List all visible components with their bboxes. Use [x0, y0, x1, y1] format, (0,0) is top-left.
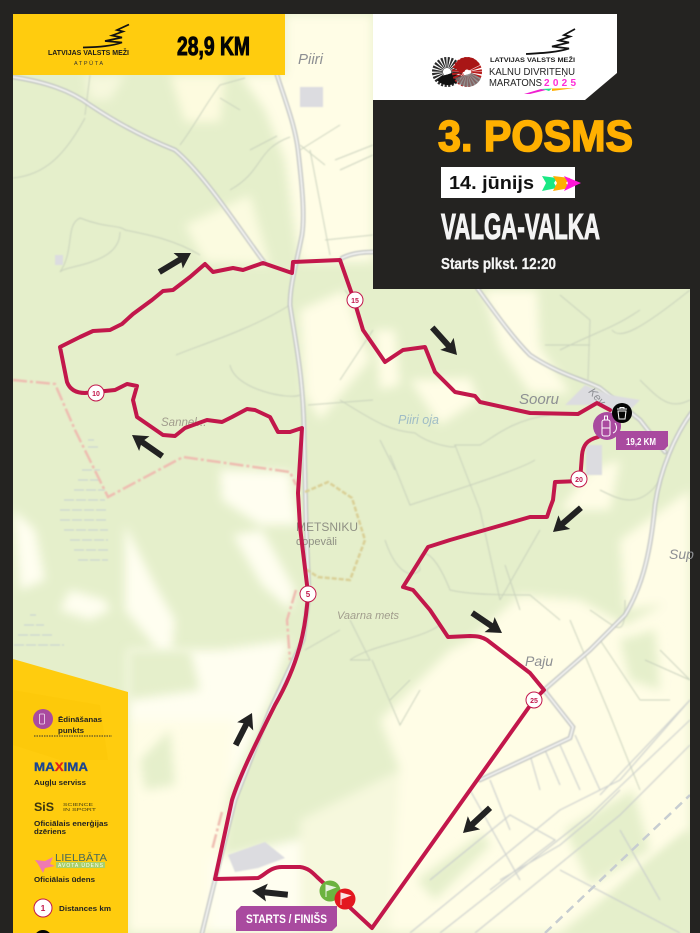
legend: maxima	[34, 760, 88, 787]
arrow: north lower left	[228, 709, 260, 749]
date box: 14. jūnijs	[449, 173, 534, 193]
logo text: LATVIJAS VALSTS MEŽI	[490, 55, 575, 64]
legend: lielbata	[34, 852, 107, 884]
distance marker: 25: 25	[530, 698, 538, 705]
place name: Kev: Kev	[586, 386, 608, 409]
distance marker: 20	[571, 471, 587, 487]
panel: legend	[13, 659, 128, 933]
protected area	[304, 482, 365, 580]
panel: title block	[373, 14, 700, 289]
distance marker: 5: 5	[306, 590, 311, 599]
place name: Metsniku dopevali	[296, 520, 358, 548]
place name: Piiri oja: Piiri oja	[398, 413, 439, 427]
arrow: northwest left	[127, 428, 167, 464]
label: starts finiss	[236, 906, 337, 931]
distance text: 28,9 KM	[177, 31, 250, 61]
legend: lielbata: Oficiālais ūdens	[34, 875, 95, 884]
legend: sis: SCIENCE	[63, 802, 93, 807]
legend stripes	[13, 690, 108, 760]
place name: Metsniku dopevali: METSNIKU	[296, 520, 358, 534]
legend: food point: Ēdināšanas	[58, 715, 102, 724]
railway	[545, 795, 690, 933]
legend: lielbata: LIELBĀTA	[55, 852, 107, 864]
logo: lightning	[526, 29, 575, 54]
legend: maxima: Augļu serviss	[34, 778, 86, 787]
legend: sis: SiS	[34, 800, 54, 814]
logo text: year: 2025	[544, 78, 576, 89]
legend: lielbata: AVOTA ŪDENS	[58, 862, 104, 869]
logo text: maratons: MARATONS	[489, 78, 542, 89]
label: 19,2 km	[616, 431, 668, 450]
arrow: southwest right	[547, 501, 587, 539]
minor roads and streams	[13, 75, 690, 790]
legend: distance marker: Distances km	[59, 904, 111, 913]
distance marker: 10: 10	[92, 391, 100, 398]
legend: maxima: MAXIMA	[34, 760, 88, 774]
place name: Sannel: Sannel...	[161, 417, 206, 429]
legend: sis: dzēriens	[34, 827, 66, 836]
panel: distance header	[13, 14, 285, 75]
legend: sis: Oficiālais enerģijas	[34, 819, 108, 828]
arrow: southeast upper middle	[426, 321, 464, 361]
logo: wheels	[437, 57, 481, 87]
legend: distance marker: 1	[41, 903, 46, 913]
distance marker: 10	[88, 385, 104, 401]
place name: Vaarna mets: Vaarna mets	[337, 610, 399, 622]
icon: trash bin	[612, 403, 632, 423]
logo: lvm atputa	[48, 24, 129, 67]
logo text: kalnu: KALNU DIVRITEŅU	[489, 67, 575, 78]
distance marker: 20: 20	[575, 477, 583, 484]
distance marker: 15	[347, 292, 363, 308]
place name: Metsniku dopevali: dopevāli	[296, 536, 337, 548]
icon: finish flag red	[334, 888, 356, 910]
place name: Sup: Sup	[669, 546, 694, 562]
place name: Sooru: Sooru	[519, 391, 560, 408]
start time: Starts plkst. 12:20	[441, 256, 556, 273]
legend: trash icon	[34, 930, 52, 933]
label: starts finiss: STARTS / FINIŠS	[246, 911, 327, 926]
logo streak	[524, 88, 575, 94]
logo: lvm atputa: LATVIJAS VALSTS MEŽI	[48, 48, 129, 57]
distance marker: 15: 15	[351, 298, 359, 305]
arrow: southwest lower	[457, 801, 496, 840]
distance marker: 25	[526, 692, 542, 708]
icon: bottle feed zone	[593, 412, 621, 440]
wetland hatching	[14, 440, 108, 645]
legend: food point	[33, 709, 102, 735]
route line	[60, 260, 610, 928]
legend: sis: IN SPORT	[63, 807, 96, 812]
arrow: northeast upper left	[155, 245, 196, 280]
frame top	[0, 0, 700, 14]
settlements	[55, 87, 640, 872]
label: 19,2 km: 19,2 KM	[626, 436, 656, 448]
arrow: southeast middle	[467, 605, 507, 640]
heading: valga-valka: VALGA-VALKA	[441, 206, 600, 247]
legend: distance marker	[34, 899, 111, 917]
map labels	[161, 51, 694, 669]
logo: lvm atputa: ATPŪTA	[74, 60, 103, 67]
place name: Piiri: Piiri	[298, 51, 324, 68]
legend: sis	[34, 800, 108, 836]
heading: 3. posms: 3. POSMS	[438, 112, 633, 161]
legend: food point: punkts	[58, 726, 84, 735]
arrow: west bottom	[251, 882, 289, 904]
place name: Paju: Paju	[525, 653, 553, 669]
logo panel	[373, 14, 617, 100]
boundary	[13, 380, 296, 850]
icon: start flag green	[320, 880, 340, 902]
date box	[441, 167, 581, 198]
distance marker: 5	[300, 586, 316, 602]
